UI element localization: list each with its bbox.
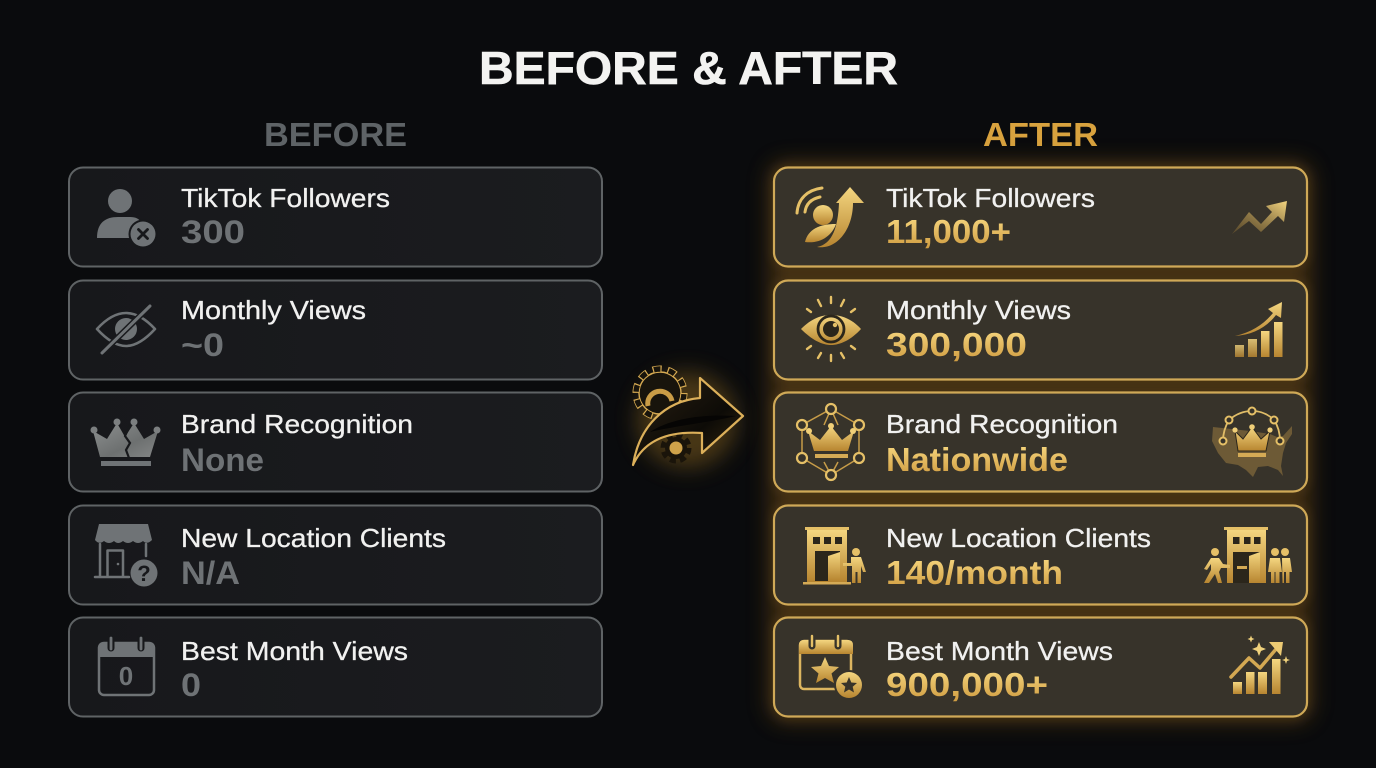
value: 300 [181, 214, 245, 250]
after card: Brand Recognition [774, 392, 1307, 492]
icon: clients entering building [1204, 527, 1292, 583]
icon: calendar with zero: 0 [119, 661, 133, 691]
after card: New Location Clients [774, 506, 1307, 604]
value: 300,000 [886, 326, 1027, 363]
value: Nationwide [886, 441, 1068, 478]
icon: user with x badge [97, 189, 158, 248]
label: Brand Recognition [181, 409, 413, 439]
before card: TikTok Followers [69, 168, 602, 266]
icon: calendar with zero [98, 638, 155, 695]
label: Monthly Views [181, 295, 366, 325]
icon: store with question badge [95, 524, 158, 586]
icon: building with client [803, 527, 866, 584]
before card: Best Month Views [69, 618, 602, 716]
value: None [181, 442, 264, 478]
label: TikTok Followers [181, 183, 390, 213]
heading: before column: BEFORE [264, 116, 407, 153]
before card: Brand Recognition [69, 392, 602, 492]
label: Best Month Views [181, 636, 408, 666]
label: New Location Clients [886, 523, 1151, 553]
icon: transformation arrow with gears [633, 369, 743, 468]
value: N/A [181, 555, 240, 591]
before card: New Location Clients [69, 506, 602, 604]
icon: calendar with star [799, 636, 864, 700]
heading: after column: AFTER [983, 116, 1098, 153]
after card: Monthly Views [774, 280, 1307, 380]
panel: after metrics [768, 161, 1313, 723]
label: Monthly Views [886, 295, 1071, 325]
value: 11,000+ [886, 213, 1011, 250]
icon: follower growth arrow [797, 187, 864, 247]
value: 140/month [886, 554, 1063, 591]
label: New Location Clients [181, 523, 446, 553]
icon: crossed-out eye [97, 306, 155, 353]
after card: Best Month Views [774, 618, 1307, 716]
icon: cracked crown [90, 418, 160, 466]
value: 0 [181, 667, 201, 703]
label: Brand Recognition [886, 409, 1118, 439]
icon: shining eye [801, 297, 861, 361]
value: ~0 [181, 327, 224, 363]
icon: growing bars [1235, 302, 1282, 357]
panel: before metrics [69, 168, 602, 716]
glow behind after cards [768, 161, 1313, 723]
label: TikTok Followers [886, 183, 1095, 213]
icon: store with question badge: ? [137, 561, 151, 586]
after card: TikTok Followers [774, 168, 1307, 266]
label: Best Month Views [886, 636, 1113, 666]
icon: crown in network [797, 404, 864, 480]
icon: rising trend arrow [1232, 201, 1287, 234]
icon: bars with sparkles [1231, 636, 1290, 694]
before card: Monthly Views [69, 280, 602, 380]
icon: crown over US map [1212, 408, 1292, 477]
main title: BEFORE & AFTER [479, 42, 898, 94]
value: 900,000+ [886, 666, 1048, 703]
